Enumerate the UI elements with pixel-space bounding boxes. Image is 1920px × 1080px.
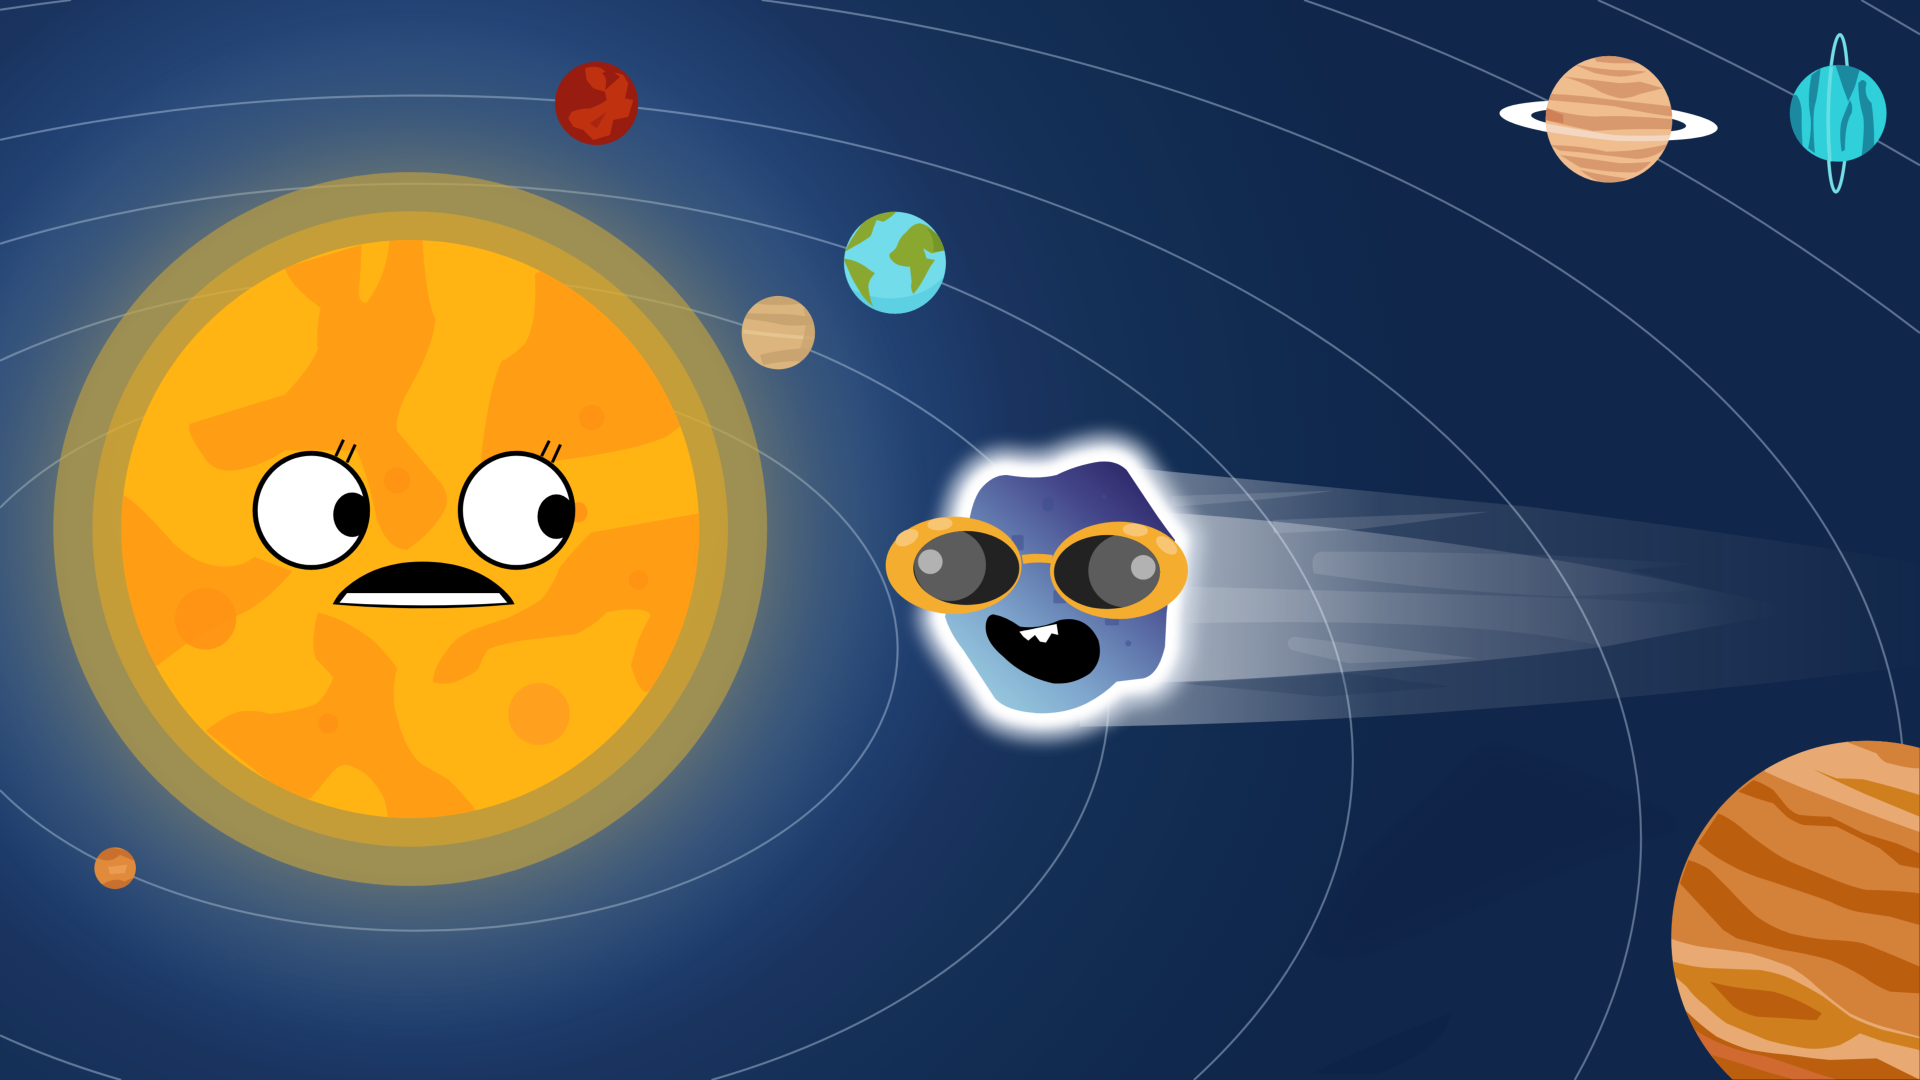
- sun: [0, 69, 878, 993]
- sun face: [255, 440, 575, 608]
- rock: [945, 461, 1175, 713]
- planet: saturn: [1498, 55, 1719, 184]
- saturn ring front band: [1545, 123, 1671, 141]
- right eye: [460, 441, 575, 567]
- left eye: [255, 440, 371, 567]
- planet: jupiter: [1670, 737, 1920, 1080]
- sun glow: [0, 9, 931, 1049]
- saturn ring: [1498, 94, 1719, 147]
- sun inner ring: [92, 211, 728, 847]
- uranus globe: [1790, 65, 1887, 162]
- comet: [886, 461, 1920, 727]
- uranus ring front: [1828, 67, 1831, 162]
- planet: earth: [843, 212, 947, 317]
- saturn globe: [1546, 56, 1672, 183]
- planet: venus: [742, 296, 817, 369]
- sun outer ring: [53, 172, 767, 886]
- planet: mars: [555, 62, 638, 145]
- faint nebula shapes: [1312, 750, 1670, 1073]
- uranus ring: [1826, 34, 1850, 192]
- white halo: [945, 461, 1175, 713]
- worried mouth: [333, 562, 514, 608]
- rock craters: [1012, 494, 1131, 646]
- comet mouth: [986, 614, 1100, 684]
- planet: mercury: [94, 845, 137, 891]
- sun disc: [121, 240, 699, 818]
- sunglasses: [886, 517, 1188, 619]
- comet body: [886, 461, 1188, 713]
- comet tail: [1079, 467, 1920, 727]
- planet: uranus: [1788, 34, 1887, 192]
- sun surface patches: [121, 240, 700, 818]
